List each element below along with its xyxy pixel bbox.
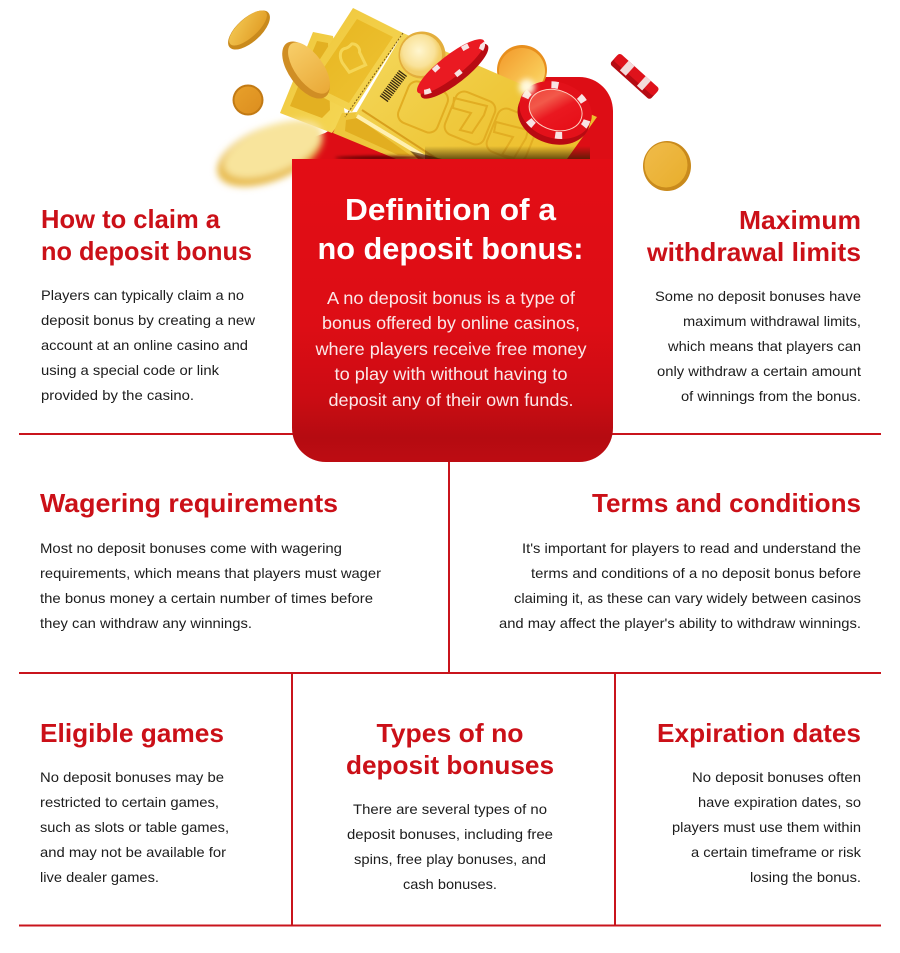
icon: coin on ticket [273,33,339,107]
text: definition body [314,288,587,410]
text: maximum withdrawal body: maximum withdrawal limits, [683,313,861,329]
text: expiration body: No deposit bonuses often [692,769,861,785]
panel: wagering requirements [40,488,381,631]
barcode [383,73,403,100]
divider lines [19,434,881,926]
text: how to claim body: deposit bonus by creating a new [41,312,256,328]
heading: types [346,718,554,780]
text: wagering body: Most no deposit bonuses come with wagering [40,540,342,556]
heading: maximum withdrawal: withdrawal limits [646,237,861,267]
text: wagering body [40,540,381,631]
panel: how to claim [41,204,256,403]
text: terms body: terms and conditions of a no deposit bonus before [531,565,861,581]
heading: types: Types of no [376,718,524,748]
text: expiration body: losing the bonus. [750,869,861,885]
text: types body: deposit bonuses, including free [347,826,553,842]
heading: definition: Definition of a [345,192,557,227]
text: terms body: claiming it, as these can vary widely between casinos [514,590,861,606]
text: how to claim body: provided by the casino. [41,387,194,403]
text: expiration body: a certain timeframe or risk [691,844,862,860]
text: definition body: deposit any of their own funds. [328,390,574,410]
heading: maximum withdrawal [646,205,861,267]
text: how to claim body [41,287,256,403]
text: terms body [499,540,861,631]
heading: wagering: Wagering requirements [40,488,338,518]
panel: expiration dates [657,718,862,885]
panel: terms and conditions [499,488,861,631]
text: maximum withdrawal body: of winnings from the bonus. [681,388,861,404]
text: definition body: where players receive free money [314,339,587,359]
text: maximum withdrawal body: Some no deposit bonuses have [655,288,861,304]
icon: orange coin behind ticket [497,45,547,95]
text: types body: cash bonuses. [403,876,497,892]
icon: small chip right [610,53,660,100]
text: wagering body: the bonus money a certain number of times before [40,590,373,606]
panel: definition back [292,77,613,159]
text: types body: There are several types of no [353,801,547,817]
text: eligible games body: and may not be available for [40,844,226,860]
text: how to claim body: account at an online casino and [41,337,248,353]
panel: definition of a no deposit bonus [292,159,613,462]
icon: large red chip [510,72,599,154]
icon: golden tickets [280,8,597,164]
text: eligible games body [40,769,229,885]
text: expiration body: have expiration dates, so [698,794,861,810]
heading: definition [318,192,584,266]
text: eligible games body: No deposit bonuses may be [40,769,224,785]
shadow on pocket [335,156,435,160]
icon: coin right [643,141,691,191]
text: how to claim body: Players can typically claim a no [41,287,244,303]
text: definition body: bonus offered by online casinos, [322,313,580,333]
icon: coin left [232,84,264,116]
text: how to claim body: using a special code or link [41,362,220,378]
heading: how to claim: How to claim a [41,204,221,234]
icon: chip middle [411,32,495,106]
panel: types of no deposit bonuses [346,718,554,892]
panel: maximum withdrawal limits [646,205,861,404]
text: definition body: to play with without having to [334,364,568,384]
heading: maximum withdrawal: Maximum [739,205,861,235]
icon: chip glare [519,79,535,95]
heading: how to claim: no deposit bonus [41,236,252,266]
text: wagering body: requirements, which means that players must wager [40,565,381,581]
icon: coin top left [222,4,276,56]
heading: how to claim [41,204,252,266]
text: maximum withdrawal body: which means that players can [667,338,861,354]
text: maximum withdrawal body [655,288,861,404]
text: maximum withdrawal body: only withdraw a certain amount [657,363,861,379]
text: terms body: and may affect the player's ability to withdraw winnings. [499,615,861,631]
text: types body [347,801,553,892]
text: expiration body: players must use them within [672,819,861,835]
heading: definition: no deposit bonus: [318,231,584,266]
heading: types: deposit bonuses [346,750,554,780]
text: definition body: A no deposit bonus is a type of [327,288,575,308]
text: expiration body [672,769,862,885]
icon: pale coin [398,32,446,78]
text: wagering body: they can withdraw any winnings. [40,615,252,631]
heading: terms: Terms and conditions [592,488,861,518]
text: types body: spins, free play bonuses, and [354,851,546,867]
icon: blurred coin [208,108,332,200]
text: eligible games body: such as slots or table games, [40,819,229,835]
text: eligible games body: live dealer games. [40,869,159,885]
heading: expiration: Expiration dates [657,718,861,748]
text: eligible games body: restricted to certain games, [40,794,219,810]
sevens on ticket [397,80,534,157]
illustration: coins and golden tickets [208,4,691,200]
heading: eligible games: Eligible games [40,718,224,748]
panel: eligible games [40,718,229,885]
text: terms body: It's important for players to read and understand the [522,540,861,556]
